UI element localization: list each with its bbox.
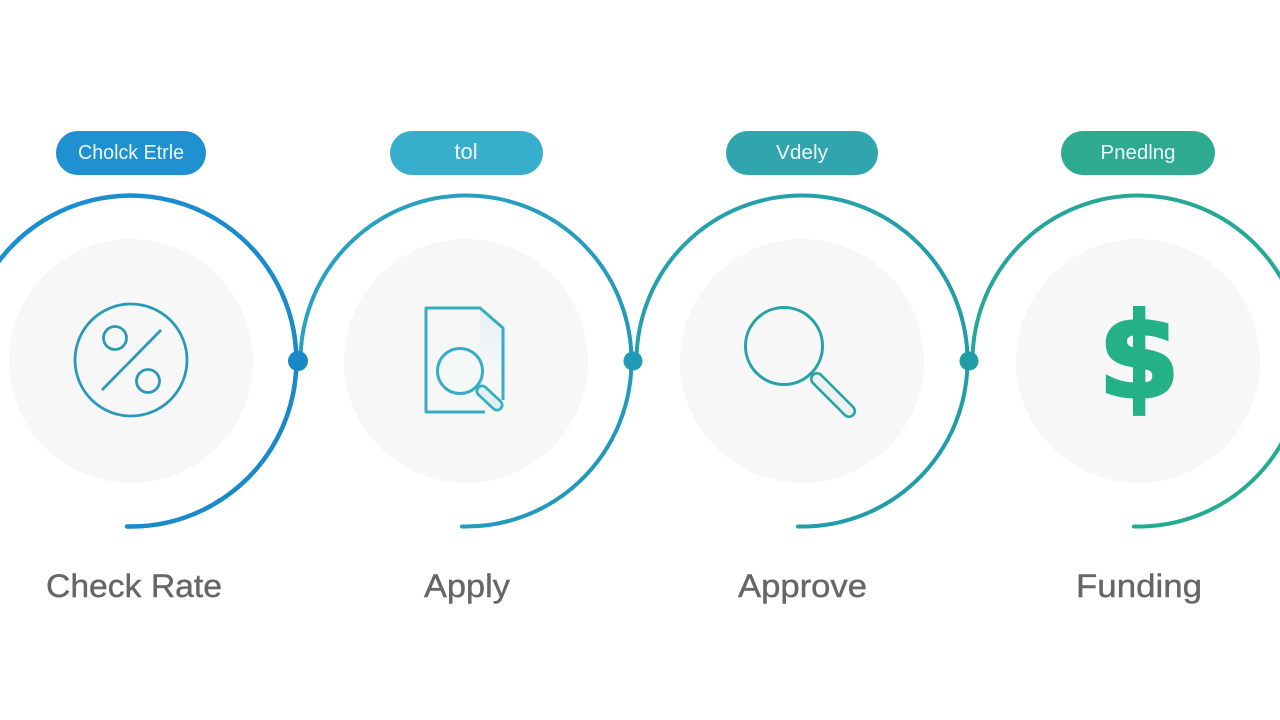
step 1 icon backdrop [9,239,253,483]
step 2: Apply [300,131,632,604]
step 3 icon backdrop [680,239,924,483]
step 2 arc [300,196,632,527]
step 1: Check Rate [0,131,296,604]
connector dots [288,351,978,371]
step 2 pill [390,131,543,175]
step 3: Approve [636,131,968,604]
icon: magnifier [746,308,849,411]
step 1 pill [56,131,206,175]
step 2 icon backdrop [344,239,588,483]
icon: dollar sign: $ [1098,287,1180,425]
step 4 label: Funding [1076,568,1202,604]
icon: document with magnifier [426,308,503,412]
step 2 pill: tol [454,139,478,164]
step 4 icon backdrop [1016,239,1260,483]
step 3 label: Approve [738,568,867,604]
step 4 pill [1061,131,1215,175]
step 1 pill: Cholck Etrle [78,142,184,164]
step 4: Funding [972,131,1280,604]
step 4 pill: Pnedlng [1100,142,1176,164]
step 1 label: Check Rate [46,568,222,604]
icon: percent [75,304,187,416]
step 3 arc [636,196,968,527]
step 1 arc [0,196,296,527]
step 3 pill [726,131,878,175]
step 3 pill: Vdely [776,142,828,164]
step 4 arc [972,196,1280,527]
step 2 label: Apply [424,568,510,604]
